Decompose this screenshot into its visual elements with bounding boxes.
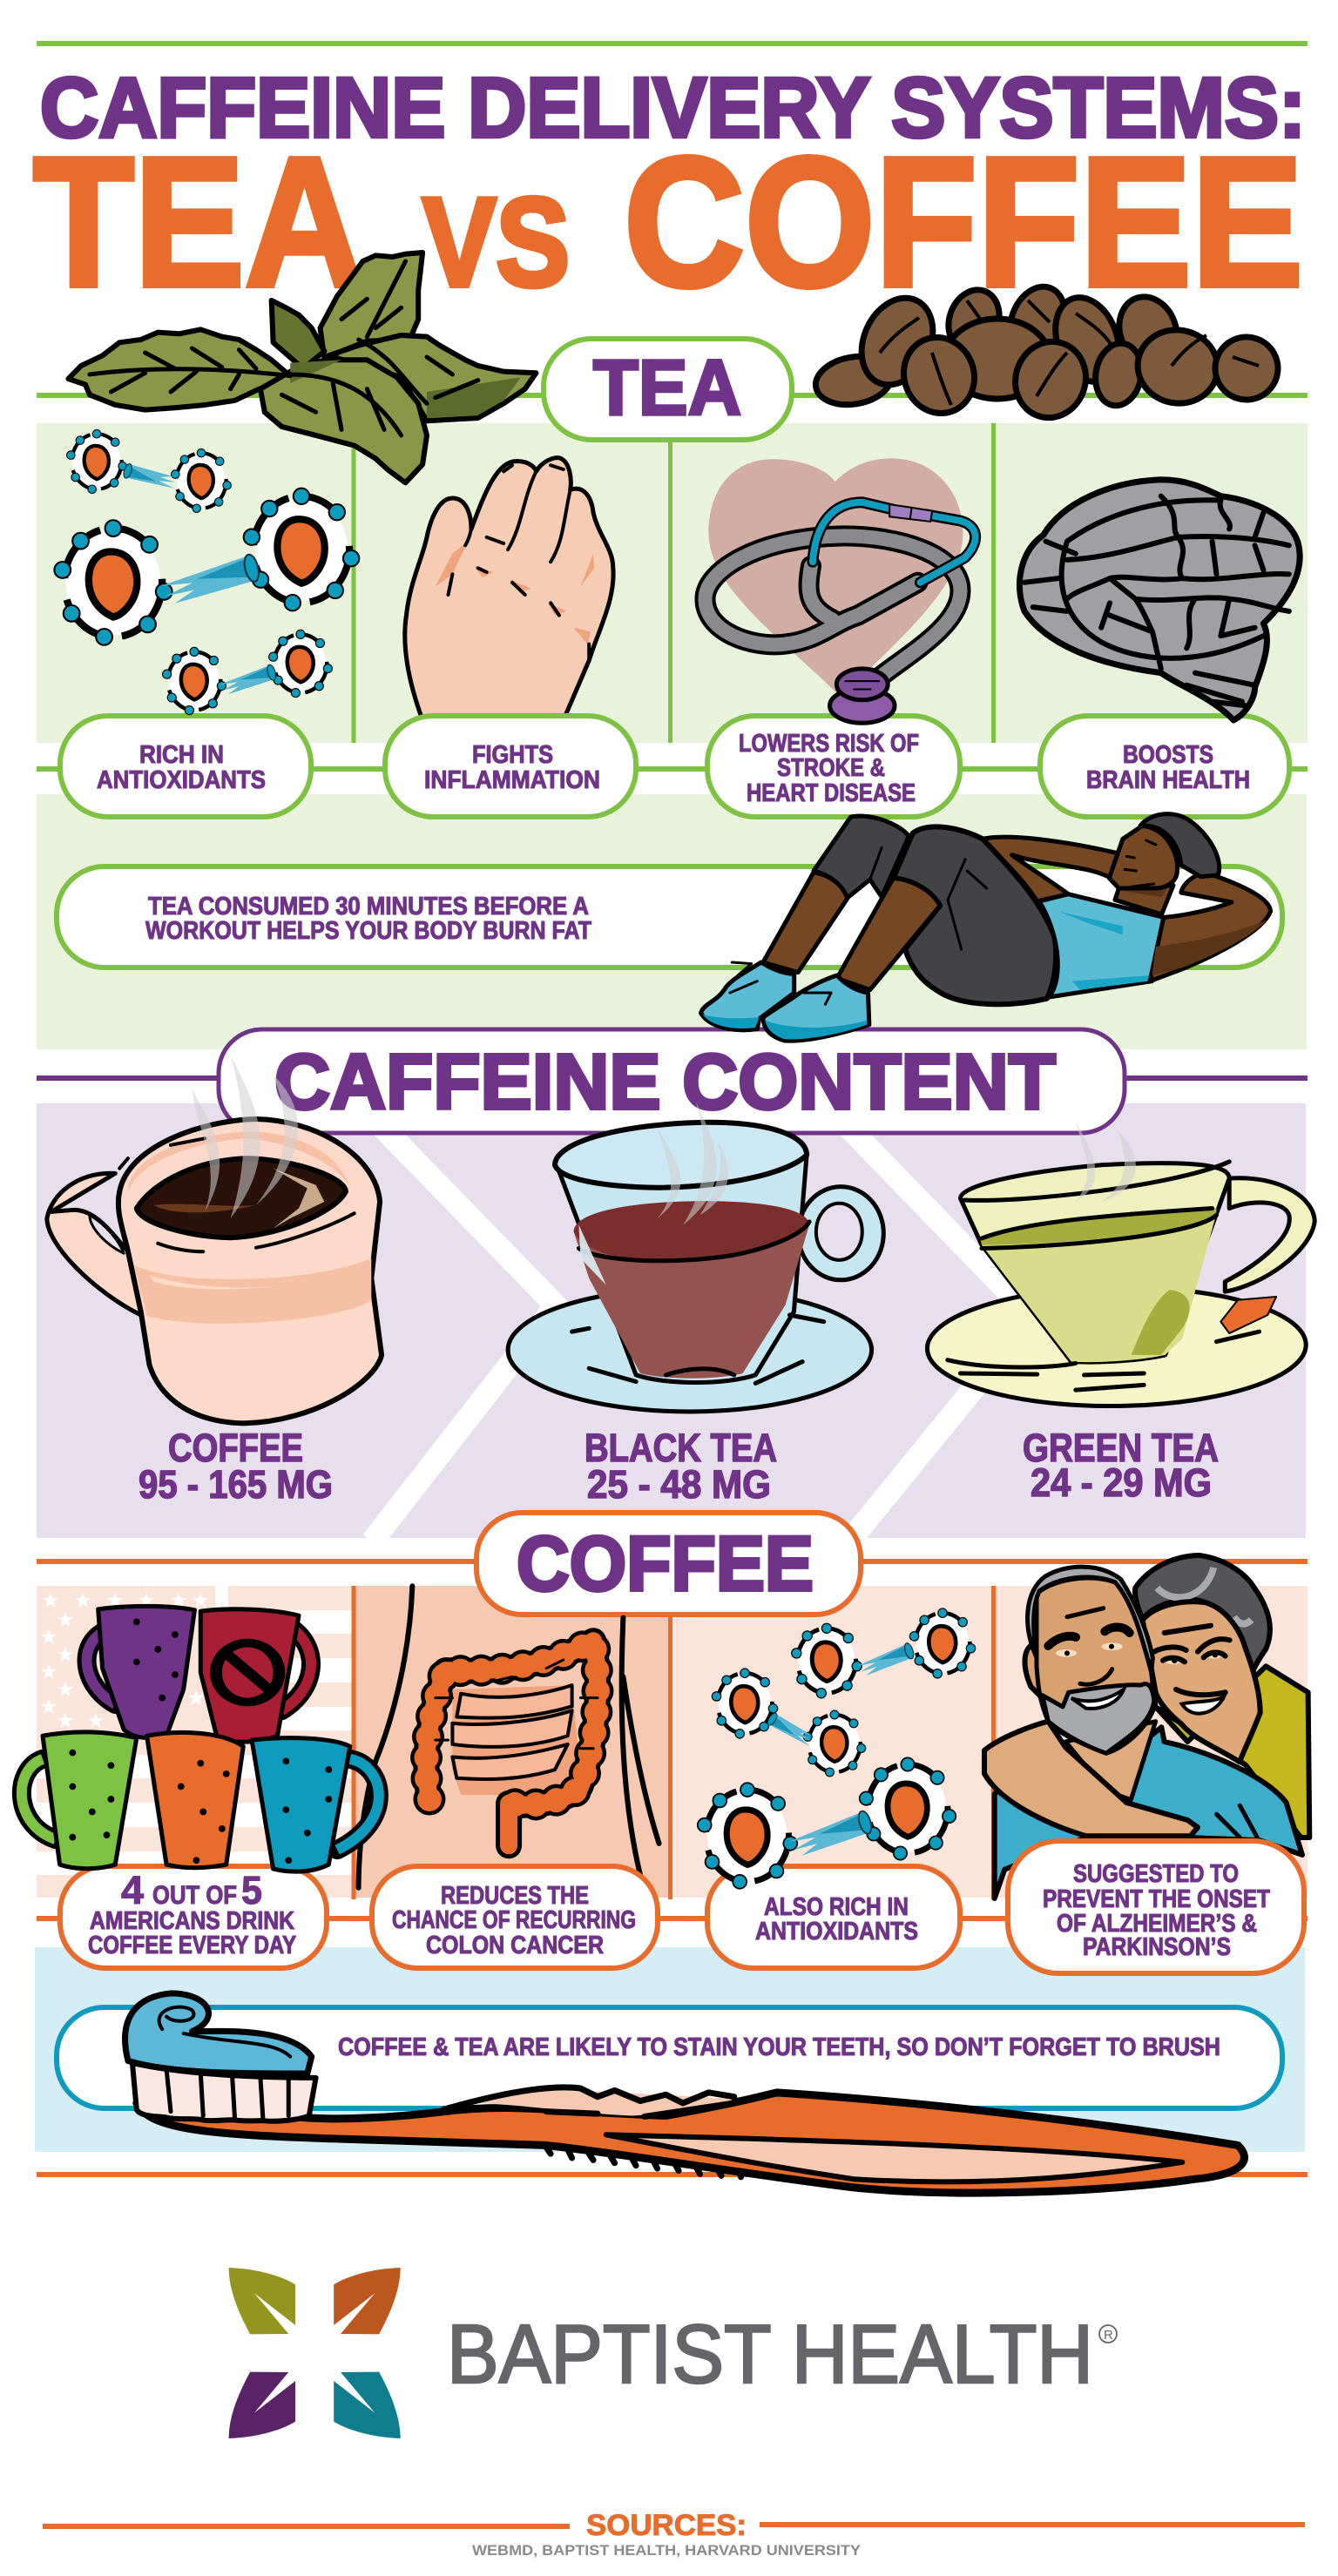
- label: green tea caffeine: 24 - 29 MG: [1031, 1460, 1212, 1505]
- molecules: coffee antioxidants: [698, 1608, 976, 1889]
- icon: toothbrush: [125, 1993, 1245, 2193]
- icon: coffee beans: [812, 279, 1285, 427]
- label: coffee caffeine: COFFEE: [168, 1426, 303, 1470]
- heading pill: tea: TEA: [593, 345, 741, 432]
- pill: lowers risk of stroke and heart disease: HEART DISEASE: [747, 779, 916, 807]
- pill: tea workout callout: [57, 867, 1282, 968]
- woman doing sit-ups: [701, 814, 1271, 1041]
- pill: rich in antioxidants: [60, 716, 311, 817]
- pill: also rich in antioxidants: ALSO RICH IN: [764, 1893, 909, 1921]
- icon: coffee mug: [47, 1119, 382, 1423]
- top rule: [37, 41, 1308, 46]
- sources heading: SOURCES:: [586, 2509, 747, 2542]
- panel: tea benefits: [37, 423, 1308, 743]
- pill: reduces colon cancer: [372, 1866, 658, 1968]
- heading pill: tea: [544, 339, 792, 440]
- icon: tea leaves: [68, 253, 536, 482]
- pill: stain your teeth callout: [57, 2007, 1282, 2108]
- heading pill: caffeine content: CAFFEINE CONTENT: [274, 1039, 1056, 1126]
- sources list: WEBMD, BAPTIST HEALTH, HARVARD UNIVERSITY: [472, 2542, 862, 2559]
- heading pill: coffee: [476, 1513, 861, 1615]
- label: coffee caffeine: 95 - 165 MG: [139, 1462, 333, 1507]
- pill: reduces colon cancer: REDUCES THE: [441, 1882, 589, 1910]
- label: black tea caffeine: BLACK TEA: [585, 1426, 777, 1470]
- logo: baptist health mark: [229, 2268, 401, 2438]
- sources heading: [43, 2509, 1305, 2542]
- pill: also rich in antioxidants: [707, 1866, 960, 1968]
- label: green tea caffeine: [1023, 1426, 1219, 1505]
- tea pills rule: [37, 766, 1308, 772]
- pill: 4 out of 5 americans: 4: [121, 1868, 144, 1912]
- icon: heart and stethoscope: [705, 458, 976, 723]
- caffeine content rule: [37, 1076, 1308, 1081]
- pill: prevents alzheimer's and parkinson's: SUGGESTED TO: [1073, 1860, 1239, 1888]
- bean creases: [880, 300, 1259, 405]
- icon: stacked mugs: [22, 1606, 379, 1871]
- pill: 4 out of 5 americans: 5: [241, 1868, 262, 1912]
- icon: hand: [405, 458, 613, 720]
- bottom rule: [37, 2172, 1308, 2177]
- icon: green tea cup: [917, 1162, 1316, 1411]
- panel: coffee benefits: [37, 1586, 1308, 1899]
- logo: baptist health wordmark: R: [1104, 2328, 1113, 2343]
- coffee section rule: [37, 1559, 1308, 1564]
- pill: reduces colon cancer: CHANCE OF RECURRING: [392, 1906, 636, 1934]
- pill: rich in antioxidants: ANTIOXIDANTS: [97, 766, 266, 794]
- pill: tea workout callout: TEA CONSUMED 30 MINUTES BEFORE A: [148, 893, 589, 920]
- heading pill: coffee: COFFEE: [517, 1520, 814, 1607]
- steam: [192, 1055, 1136, 1225]
- pill: fights inflammation: FIGHTS: [472, 741, 553, 769]
- pills rule and blue panel background: [35, 1916, 1308, 2152]
- pill: lowers risk of stroke and heart disease: STROKE &: [777, 754, 885, 782]
- pill: prevents alzheimer's and parkinson's: PREVENT THE ONSET: [1043, 1885, 1270, 1913]
- label: coffee caffeine: [139, 1426, 333, 1507]
- panel: tea workout: [37, 794, 1307, 1049]
- pill: prevents alzheimer's and parkinson's: [1008, 1841, 1304, 1973]
- title: tea vs coffee: [33, 118, 1303, 325]
- label: green tea caffeine: GREEN TEA: [1023, 1426, 1219, 1470]
- pill: 4 out of 5 americans: COFFEE EVERY DAY: [88, 1932, 296, 1959]
- icon: black tea glass: [508, 1123, 883, 1412]
- pill: rich in antioxidants: RICH IN: [139, 741, 224, 769]
- pill: stain your teeth callout: COFFEE & TEA ARE LIKELY TO STAIN YOUR TEETH, SO DON’T FORGET TO BRUSH: [338, 2033, 1220, 2061]
- title: caffeine delivery systems: CAFFEINE DELIVERY SYSTEMS:: [40, 60, 1306, 155]
- pill: fights inflammation: INFLAMMATION: [424, 766, 600, 794]
- pill: 4 out of 5 americans: [60, 1866, 327, 1968]
- icon: brain: [1019, 480, 1300, 720]
- pill: lowers risk of stroke and heart disease: LOWERS RISK OF: [739, 730, 919, 758]
- logo: baptist health wordmark: BAPTIST HEALTH: [447, 2308, 1093, 2401]
- pill: boosts brain health: BRAIN HEALTH: [1086, 766, 1250, 794]
- pill: prevents alzheimer's and parkinson's: PARKINSON’S: [1083, 1933, 1231, 1961]
- pill: boosts brain health: [1040, 716, 1289, 817]
- label: black tea caffeine: 25 - 48 MG: [587, 1462, 771, 1507]
- title: tea vs coffee: VS: [422, 172, 570, 313]
- title: tea vs coffee: TEA: [33, 118, 364, 325]
- icon: elderly couple: [984, 1555, 1309, 1898]
- tea section rule: [37, 393, 1308, 398]
- pill: prevents alzheimer's and parkinson's: OF ALZHEIMER’S &: [1057, 1910, 1257, 1938]
- pill: reduces colon cancer: COLON CANCER: [426, 1932, 604, 1959]
- molecules: tea antioxidants: [54, 429, 359, 715]
- label: black tea caffeine: [585, 1426, 777, 1507]
- pill: lowers risk of stroke and heart disease: [707, 716, 960, 817]
- pill: also rich in antioxidants: ANTIOXIDANTS: [755, 1918, 918, 1945]
- icon: colon and abdomen: [359, 1586, 659, 1888]
- panel: caffeine content: [37, 1103, 1306, 1541]
- pill: tea workout callout: WORKOUT HELPS YOUR BODY BURN FAT: [145, 917, 591, 945]
- pill: boosts brain health: BOOSTS: [1123, 741, 1213, 769]
- pill: fights inflammation: [385, 716, 636, 817]
- pill: 4 out of 5 americans: OUT OF: [152, 1881, 237, 1910]
- pill: 4 out of 5 americans: AMERICANS DRINK: [90, 1907, 294, 1935]
